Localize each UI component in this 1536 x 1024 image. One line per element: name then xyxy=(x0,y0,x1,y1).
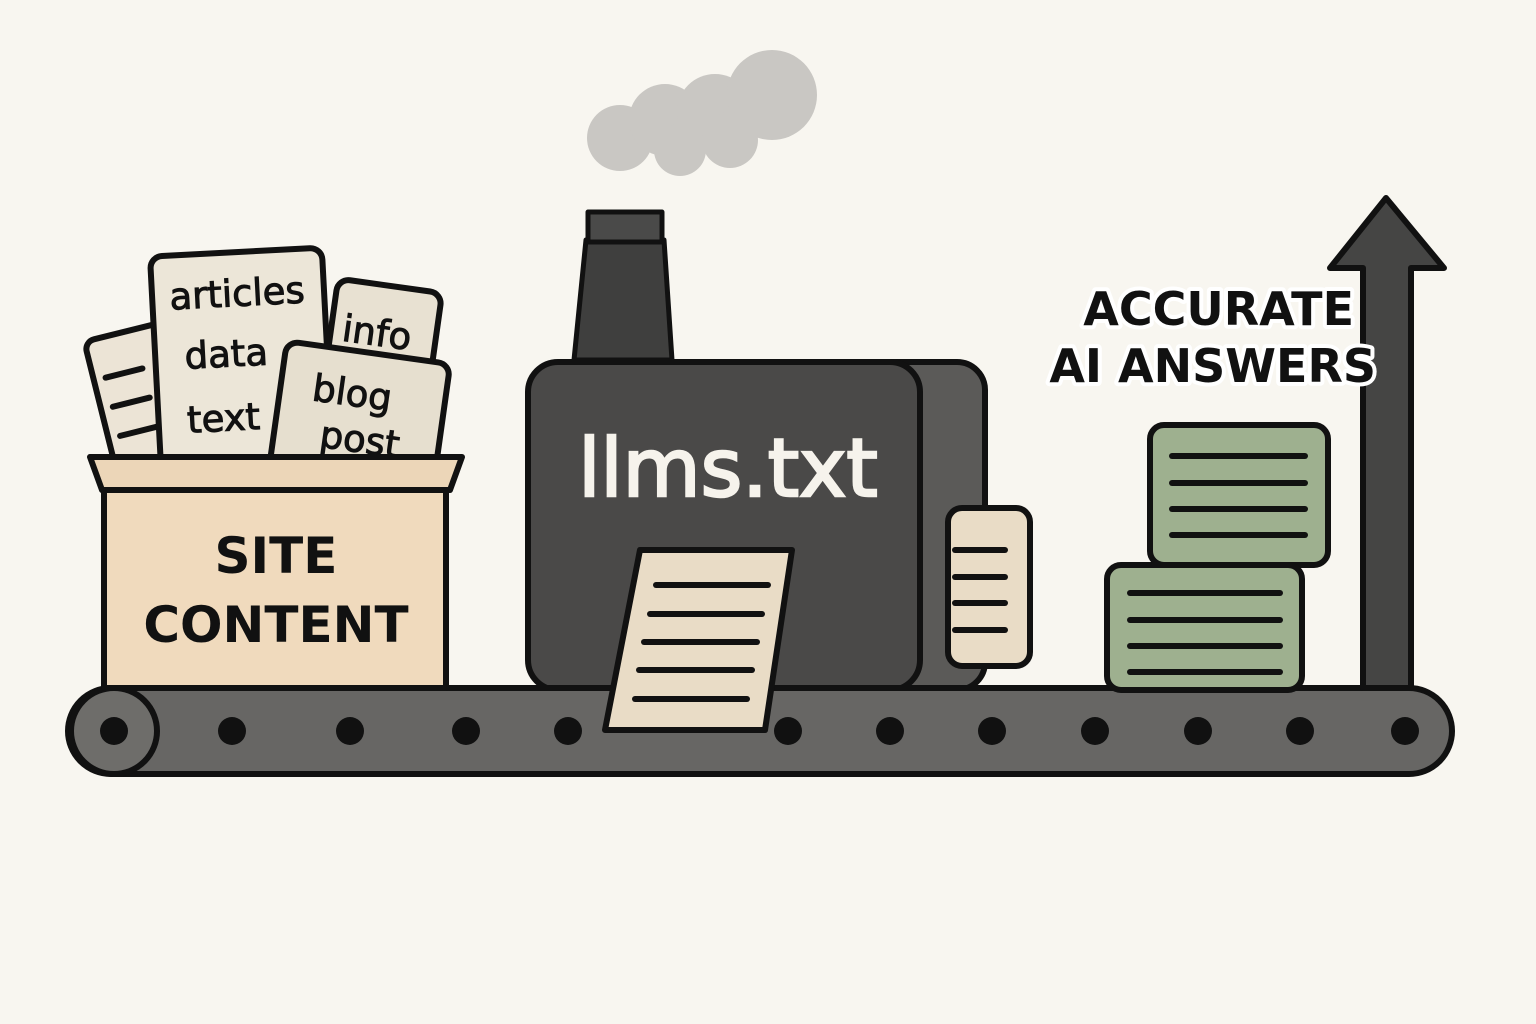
box: site content: CONTENT xyxy=(143,596,409,654)
info paper: info xyxy=(340,307,414,359)
chimney xyxy=(574,212,672,360)
box: site content: SITE xyxy=(215,527,337,585)
articles paper xyxy=(150,248,334,486)
accurate AI answers label: ACCURATE xyxy=(1083,282,1354,336)
answer cards xyxy=(1107,425,1328,690)
left paper xyxy=(84,320,213,507)
processed paper on belt xyxy=(605,550,792,730)
articles paper: articles xyxy=(168,269,306,319)
blog post paper: post xyxy=(317,413,402,467)
articles paper: text xyxy=(186,395,261,442)
arrow up xyxy=(1330,198,1444,688)
smoke cloud xyxy=(587,50,817,176)
info paper xyxy=(319,279,442,432)
papers in box xyxy=(84,248,450,507)
blog post paper xyxy=(267,341,450,503)
accurate AI answers label xyxy=(1049,282,1376,393)
accurate AI answers label: AI ANSWERS xyxy=(1049,339,1376,393)
side output paper xyxy=(948,508,1030,666)
machine label: llms.txt xyxy=(578,422,878,515)
factory machine xyxy=(528,362,985,690)
blog post paper: blog xyxy=(310,366,395,420)
conveyor belt xyxy=(68,688,1452,774)
box: site content xyxy=(90,457,462,688)
articles paper: data xyxy=(183,331,269,378)
